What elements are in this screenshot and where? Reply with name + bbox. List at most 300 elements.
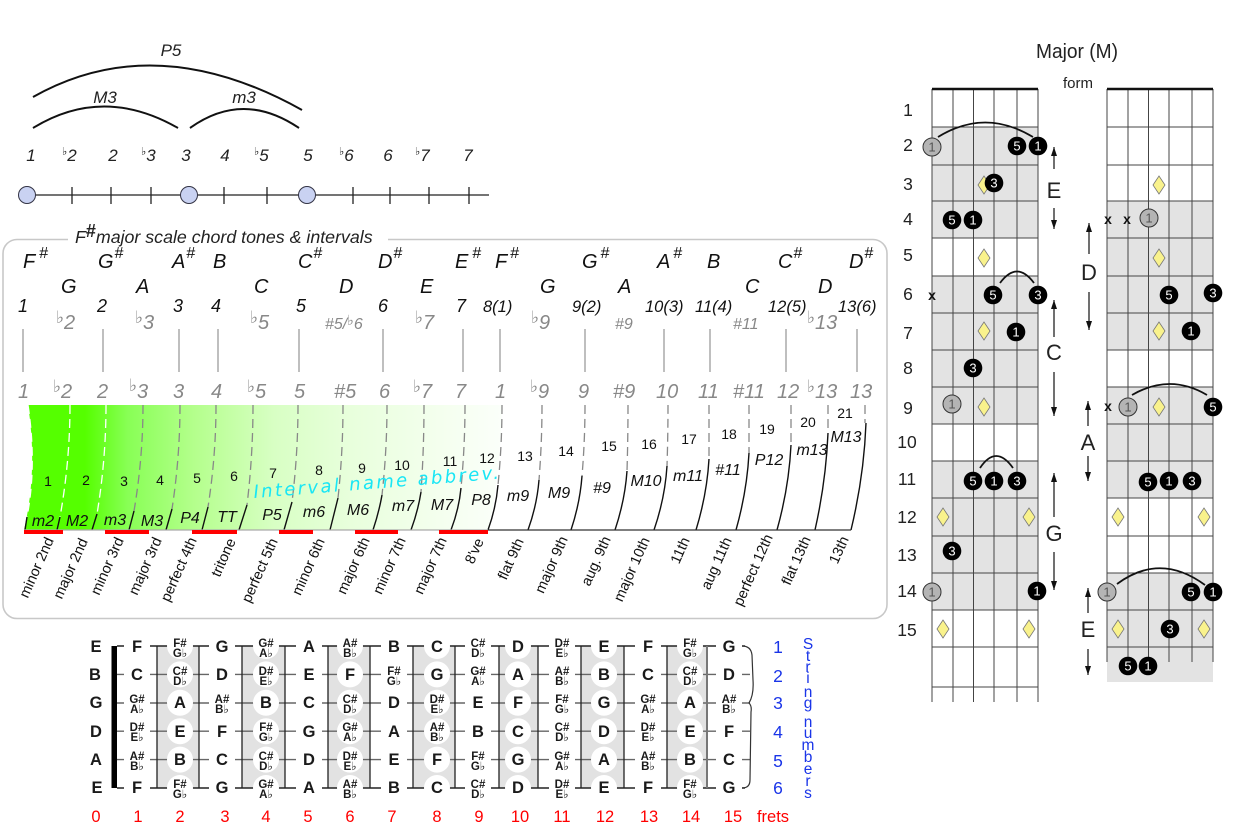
vertical label: String numbers: r	[805, 773, 811, 790]
note names row 1: #	[393, 245, 402, 262]
interval degrees, lower row: 7	[455, 381, 467, 403]
string 1 notes: F#	[173, 638, 187, 650]
string 4 notes: B♭	[430, 732, 444, 744]
shaded fret bands	[157, 646, 707, 788]
form arrows and letters: E, C, G: G	[1045, 521, 1063, 546]
arc label: P5: P5	[161, 41, 182, 60]
interval abbreviations: m13	[796, 442, 828, 459]
note names row 1: #	[601, 245, 610, 262]
open string notes: E	[90, 638, 102, 656]
rotated interval names: 11th	[668, 535, 694, 566]
note names row 1: #	[39, 245, 48, 262]
scale degree labels: 4	[220, 146, 230, 165]
chord tone dots: 1	[1144, 658, 1152, 674]
open string notes	[89, 638, 103, 797]
rotated interval names: major 9th	[532, 534, 572, 596]
interval degrees, lower row: ♭	[129, 376, 137, 396]
note names row 2	[61, 276, 832, 298]
string 2 notes: B♭	[555, 676, 569, 688]
fret numbers: 4	[261, 808, 271, 826]
fret number column: 5	[903, 245, 913, 265]
altered degrees, upper row: ♭	[415, 308, 423, 328]
string 4 notes: E	[684, 723, 696, 741]
string 3 notes: F	[513, 694, 523, 712]
interval degrees, lower row: 1	[495, 381, 506, 403]
string 5 notes: F	[432, 751, 442, 769]
string 3 notes: G#	[640, 694, 656, 706]
note names row 2: D	[339, 276, 353, 298]
scale degrees: 3	[173, 296, 183, 316]
interval abbreviations: P8	[471, 492, 491, 509]
interval abbreviations: #9	[593, 480, 611, 497]
string 5 notes: C#	[259, 751, 274, 763]
diagram: chord-tone arcs and scale line	[18, 41, 489, 204]
string numbers: 5	[773, 751, 783, 771]
string 4 notes: F	[217, 723, 227, 741]
interval degrees, lower row: 7	[421, 381, 433, 403]
connector lines	[23, 329, 857, 372]
root markers: 1	[1124, 400, 1132, 414]
string 6 notes	[132, 779, 735, 801]
string 5 notes: F#	[471, 751, 485, 763]
scale degree labels: 5	[259, 146, 269, 165]
string 1 notes: G♭	[173, 648, 187, 660]
rotated interval names: flat 13th	[779, 534, 815, 588]
open string notes: G	[90, 694, 102, 712]
green gradient fade	[24, 405, 502, 530]
altered degrees, upper row	[56, 308, 837, 334]
string 2 notes: F#	[387, 666, 401, 678]
fret number column: 6	[903, 284, 913, 304]
chord tone dots: 3	[948, 544, 956, 558]
string 6 notes: F	[643, 779, 653, 797]
string 1 notes: E	[598, 638, 610, 656]
string 4 notes	[130, 722, 734, 744]
string 3 notes: A	[174, 694, 186, 712]
string 2 notes: A♭	[471, 676, 485, 688]
interval abbreviations: M10	[630, 473, 662, 490]
interval degrees, lower row: 3	[137, 381, 148, 403]
string 6 notes: F	[132, 779, 142, 797]
vertical label: String numbers: i	[806, 670, 810, 687]
root markers: 1	[948, 396, 956, 412]
chord tone dots	[1119, 284, 1222, 675]
interval abbreviations: m3	[104, 512, 126, 529]
neck grid	[1107, 89, 1213, 662]
string numbers: 6	[773, 778, 783, 798]
scale degrees: 7	[456, 296, 467, 316]
scale line with ticks	[27, 187, 489, 204]
note names row 1: E	[455, 251, 468, 273]
scale degree labels: 6	[383, 146, 393, 165]
note names row 2: E	[420, 276, 434, 298]
shaded chord form regions	[932, 127, 1038, 610]
interval degrees, lower row: 5	[255, 381, 267, 403]
chord tone dots: 1	[990, 474, 998, 488]
interval degrees, lower row: 1	[18, 381, 29, 403]
note names row 1: D	[378, 251, 392, 273]
string 3 notes: C	[303, 694, 315, 712]
fret number column: 3	[903, 174, 913, 194]
note names row 1: B	[707, 251, 720, 273]
string 6 notes: C#	[471, 779, 486, 791]
rotated interval names: major 10th	[611, 535, 654, 604]
chord tone dots: 1	[1187, 324, 1195, 338]
string 1 notes: G♭	[683, 648, 697, 660]
string 6 notes: B	[388, 779, 400, 797]
string 1 notes: F	[132, 638, 142, 656]
vertical label: String numbers: s	[804, 785, 812, 802]
string 2 notes: E	[303, 666, 315, 684]
fret numbers: 0	[91, 808, 101, 826]
chord tone dots: 5	[1165, 288, 1173, 302]
rotated interval names: 13th	[827, 534, 853, 566]
strings	[117, 674, 750, 760]
interval abbreviations: M13	[830, 429, 862, 446]
interval degrees, lower row: ♭	[807, 377, 815, 397]
string numbers: 3	[773, 693, 783, 713]
chart: fretboard note map	[89, 636, 814, 826]
string numbers	[773, 637, 783, 798]
muted string mark: x	[928, 287, 936, 303]
string 6 notes: E	[598, 779, 610, 797]
nut	[932, 88, 1038, 90]
fret numbers: 12	[596, 808, 614, 826]
string 4 notes: D	[598, 723, 610, 741]
muted string marks	[1104, 211, 1131, 414]
interval name abbreviation caption: Interval name abbrev.	[253, 463, 500, 503]
rotated interval names: major 3rd	[126, 535, 166, 598]
note names row 1: #	[864, 245, 873, 262]
interval degrees, lower row: ♭	[413, 377, 421, 397]
position diamonds	[1112, 176, 1210, 638]
note names row 1: B	[213, 251, 226, 273]
interval degrees, lower row: 13	[850, 381, 872, 403]
interval abbreviations: P4	[180, 510, 200, 527]
string 2 notes: D	[723, 666, 735, 684]
string 4 notes: D#	[130, 722, 145, 734]
red octave-pattern bars	[24, 530, 488, 534]
fret number column: 15	[897, 620, 917, 640]
frets	[157, 646, 667, 788]
rotated interval names: aug 11th	[699, 535, 736, 592]
scale degrees: 13(6)	[838, 298, 877, 316]
semitone numbers: 15	[601, 438, 617, 454]
chord tone dots: 1	[1012, 324, 1020, 340]
interval abbreviations: #11	[715, 462, 741, 479]
string 3 notes: E	[472, 694, 484, 712]
chord tone dots: 1	[1165, 474, 1173, 488]
string 5 notes: D	[303, 751, 315, 769]
title: Major (M): Major (M)	[1036, 41, 1118, 63]
scale degrees: 5	[296, 296, 307, 316]
string 3 notes: B♭	[215, 704, 229, 716]
altered degrees, upper row: ♭	[135, 308, 143, 328]
string 5 notes: G#	[554, 751, 570, 763]
form arrows and letters: D, A, E: A	[1081, 430, 1096, 455]
string 2 notes: C#	[173, 666, 188, 678]
string 2 notes: G♭	[387, 676, 401, 688]
semitone numbers: 20	[800, 414, 816, 430]
scale degree labels: 1	[26, 146, 36, 165]
note names row 1: G	[98, 251, 114, 273]
string 4 notes: F	[724, 723, 734, 741]
string 1 notes: D♭	[471, 648, 485, 660]
scale degree labels: 7	[420, 146, 430, 165]
string 6 notes: A#	[343, 779, 358, 791]
note names row 1: #	[673, 245, 682, 262]
note names row 2: G	[61, 276, 77, 298]
chord tone dots	[943, 137, 1047, 600]
interval abbreviations	[32, 429, 862, 530]
string 2 notes: G	[431, 666, 443, 684]
neck grid	[932, 89, 1038, 702]
string 4 notes: E	[174, 723, 186, 741]
vertical label: String numbers: t	[806, 648, 811, 665]
string 4 notes: G#	[342, 722, 358, 734]
scale degrees: 6	[378, 296, 389, 316]
chord tone dots: 5	[1013, 138, 1021, 154]
fret number column: 8	[903, 358, 913, 378]
string 4 notes: E♭	[641, 732, 655, 744]
vertical label: String numbers: b	[804, 749, 812, 766]
string 5 notes: E	[388, 751, 400, 769]
semitone numbers: 1	[44, 473, 52, 489]
shaded chord form regions	[1107, 201, 1213, 682]
string 4 notes: G	[303, 723, 315, 741]
semitone numbers: 8	[315, 462, 323, 478]
semitone numbers: 13	[517, 448, 533, 464]
interval degrees, lower row: 2	[60, 381, 72, 403]
interval degrees, lower row: ♭	[53, 377, 61, 397]
string 4 notes: G♭	[259, 732, 273, 744]
string 5 notes: G	[512, 751, 524, 769]
chord tone dots: 1	[1033, 584, 1041, 598]
fret numbers: 9	[474, 808, 484, 826]
string 3 notes: G♭	[555, 704, 569, 716]
semitone numbers: 21	[837, 405, 853, 421]
note names row 2: A	[135, 276, 149, 298]
string 2 notes: E♭	[259, 676, 273, 688]
rotated interval names: flat 9th	[495, 536, 528, 582]
string 1 notes: F	[643, 638, 653, 656]
string 1 notes: A	[303, 638, 315, 656]
fret numbers: 3	[220, 808, 230, 826]
open string notes: D	[90, 723, 102, 741]
string 4 notes: E♭	[130, 732, 144, 744]
altered degrees, upper row: #5/	[325, 316, 347, 333]
rotated interval names: minor 3rd	[88, 535, 128, 598]
string 2 notes: D#	[259, 666, 274, 678]
note names row 1: A	[657, 251, 670, 273]
altered degrees, upper row: #11	[733, 316, 759, 333]
string 5 notes: A	[598, 751, 610, 769]
string 5 notes: D#	[343, 751, 358, 763]
fret number column: 4	[903, 209, 913, 229]
string 1 notes: A#	[343, 638, 358, 650]
vertical label: String numbers: e	[804, 761, 812, 778]
string 3 notes	[129, 694, 737, 716]
string brace	[742, 646, 753, 788]
dashed interval dividers	[27, 405, 865, 517]
interval degrees, lower row: 9	[578, 381, 589, 403]
scale degrees: 12(5)	[768, 298, 807, 316]
chord tone dots: 3	[969, 360, 977, 376]
string 5 notes: E♭	[343, 761, 357, 773]
root markers: 1	[1103, 584, 1111, 600]
interval degrees, lower row: 3	[173, 381, 184, 403]
fret number column: 14	[897, 581, 917, 601]
string 3 notes: E♭	[430, 704, 444, 716]
note names row 1: F	[495, 251, 507, 273]
interval degrees, lower row: 13	[815, 381, 837, 403]
semitone numbers: 5	[193, 470, 201, 486]
string 3 notes: B♭	[722, 704, 736, 716]
scale degree labels: 2	[66, 146, 77, 165]
nut	[1107, 88, 1213, 90]
open string notes: B	[89, 666, 101, 684]
string 2 notes: F	[345, 666, 355, 684]
vertical label: String numbers: S	[803, 636, 813, 653]
arc label: m3: m3	[232, 88, 256, 107]
root markers	[1098, 209, 1158, 601]
interval degrees, lower row: 10	[656, 381, 678, 403]
note backgrounds	[137, 637, 729, 798]
string numbers: 4	[773, 722, 783, 742]
note names row 2: G	[540, 276, 556, 298]
tie arcs	[938, 122, 1034, 468]
string 3 notes: D#	[430, 694, 445, 706]
chord tone dots: 3	[1209, 286, 1217, 300]
fret numbers: frets	[757, 808, 789, 826]
string 6 notes: B♭	[343, 789, 357, 801]
string 5 notes: C	[723, 751, 735, 769]
panel heading: major scale chord tones & intervals	[96, 227, 373, 247]
arc: P5	[33, 65, 302, 110]
scale degrees: 1	[18, 296, 28, 316]
fret numbers: 11	[553, 808, 571, 826]
string 6 notes: F#	[173, 779, 187, 791]
chord tone dots: 5	[1209, 400, 1217, 414]
interval abbreviations: M2	[66, 513, 88, 530]
note names row 1: C	[298, 251, 312, 273]
string 3 notes: A#	[722, 694, 737, 706]
string 6 notes: G#	[258, 779, 274, 791]
altered degrees, upper row: 5	[258, 312, 270, 334]
string 4 notes: C#	[555, 722, 570, 734]
scale degree labels	[26, 145, 473, 165]
string 5 notes: C	[216, 751, 228, 769]
root, third and fifth markers	[18, 186, 316, 204]
altered degrees, upper row: 9	[539, 312, 550, 334]
string 2 notes: A	[512, 666, 524, 684]
form arrows and letters: D, A, E: D	[1081, 260, 1097, 285]
interval abbreviations: M9	[548, 485, 570, 502]
string 6 notes: A♭	[259, 789, 273, 801]
interval degrees, lower row: 4	[211, 381, 222, 403]
note names row 1: F	[23, 251, 35, 273]
note names row 1: A	[172, 251, 185, 273]
fret number column: 1	[903, 100, 913, 120]
chord tone dots: 3	[1188, 474, 1196, 488]
string 2 notes: D	[216, 666, 228, 684]
chord tone dots: 5	[1187, 584, 1195, 600]
interval abbreviations: M7	[431, 497, 454, 514]
root markers: 1	[1145, 210, 1153, 226]
chord tone dots: 5	[989, 288, 997, 302]
vertical label: String numbers: n	[804, 684, 812, 701]
interval degrees, lower row	[18, 376, 872, 403]
string 6 notes: C	[431, 779, 443, 797]
form arrows and letters: E, C, G: E	[1047, 178, 1061, 203]
rotated interval names: minor 6th	[289, 536, 329, 598]
scale degree labels: ♭	[254, 145, 259, 158]
string 1 notes: D#	[555, 638, 570, 650]
interval abbreviations: M6	[347, 502, 369, 519]
nut	[112, 646, 117, 788]
string 2 notes: C	[642, 666, 654, 684]
semitone numbers: 9	[358, 460, 366, 476]
scale degree labels: 2	[107, 146, 118, 165]
string 5 notes: A#	[130, 751, 145, 763]
chord tone dots: 3	[1166, 622, 1174, 636]
note names row 2: C	[254, 276, 269, 298]
fret number column: 10	[897, 432, 917, 452]
interval degrees, lower row: 12	[777, 381, 799, 403]
semitone numbers: 6	[230, 468, 238, 484]
string 2 notes: D♭	[173, 676, 187, 688]
rotated interval names: tritone	[209, 536, 240, 579]
fret numbers: 2	[175, 808, 185, 826]
panel: F# major scale chord tones and intervals	[3, 221, 887, 618]
interval abbreviations: TT	[217, 509, 238, 526]
altered degrees, upper row: ♭	[56, 308, 64, 328]
arc label: M3: M3	[93, 88, 117, 107]
fret numbers: 10	[511, 808, 529, 826]
string 3 notes: A♭	[641, 704, 655, 716]
string 3 notes: D	[388, 694, 400, 712]
fret numbers: 7	[387, 808, 397, 826]
form arrows and letters: D, A, E: E	[1081, 617, 1095, 642]
altered degrees, upper row: 3	[143, 312, 154, 334]
note names row 1: #	[115, 245, 124, 262]
panel frame	[3, 240, 887, 618]
scale degrees: 10(3)	[645, 298, 684, 316]
fret numbers: 5	[303, 808, 313, 826]
string 2 notes: C	[131, 666, 143, 684]
chord tone dots: 5	[1124, 658, 1132, 674]
note names row 1: D	[849, 251, 863, 273]
altered degrees, upper row: 2	[63, 312, 75, 334]
string 5 notes: B	[684, 751, 696, 769]
altered degrees, upper row: ♭	[807, 308, 815, 328]
string 3 notes: A#	[215, 694, 230, 706]
scale degree labels: ♭	[415, 145, 420, 158]
string 1 notes: B♭	[343, 648, 357, 660]
interval degrees, lower row: #9	[613, 381, 635, 403]
interval degrees, lower row: 5	[294, 381, 306, 403]
chord tone dots: 3	[1013, 474, 1021, 488]
chord tone dots: 5	[1144, 474, 1152, 490]
chord tone dots: 3	[1034, 288, 1042, 302]
interval degrees, lower row: #5	[334, 381, 357, 403]
panel heading: F	[75, 227, 86, 247]
semitone numbers: 12	[479, 450, 495, 466]
scale degree labels: 3	[181, 146, 191, 165]
string 1 notes: C	[431, 638, 443, 656]
semitone numbers: 16	[641, 436, 657, 452]
note names row 1: #	[510, 245, 519, 262]
